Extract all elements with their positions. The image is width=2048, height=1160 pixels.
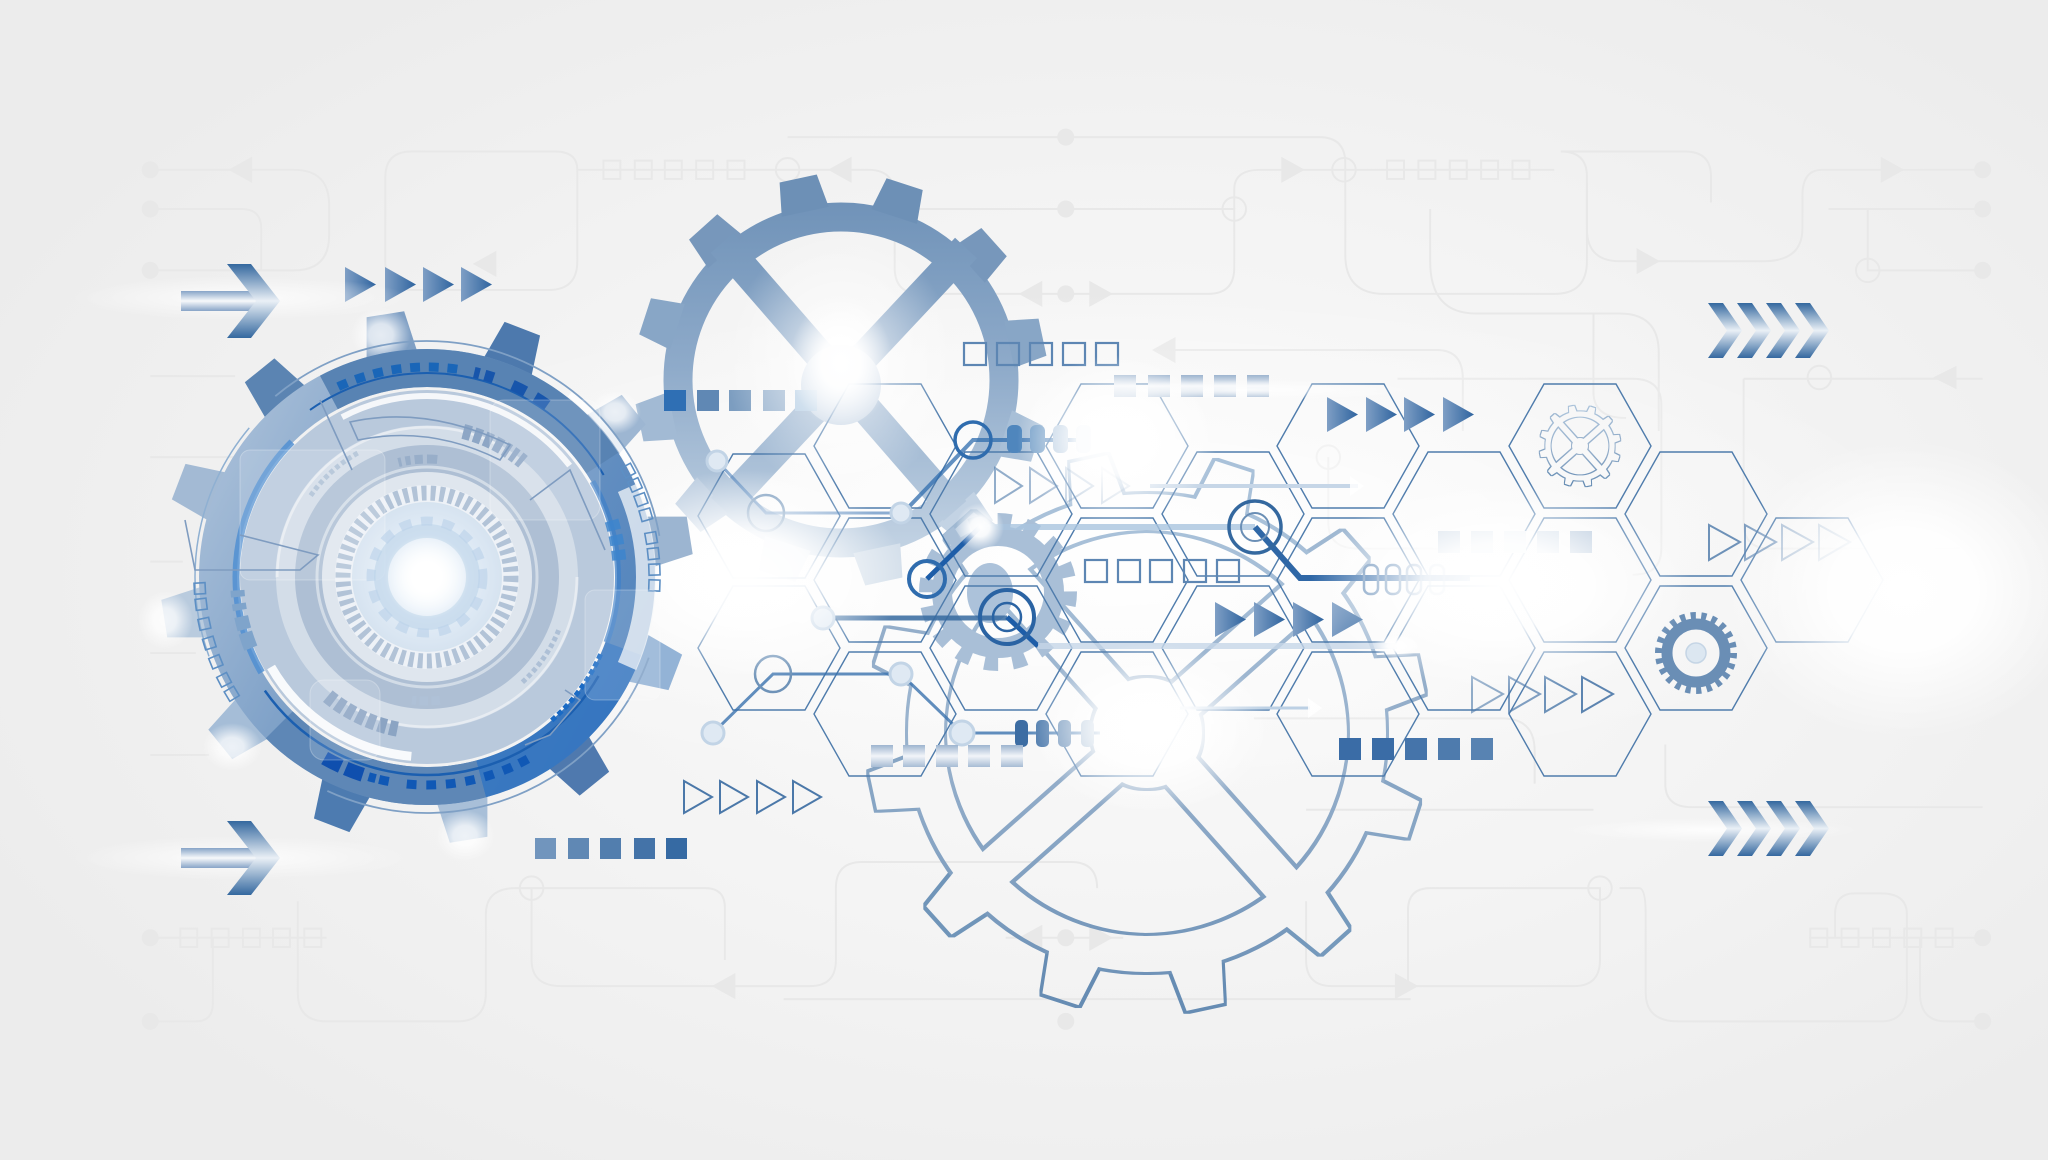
translucent overlay panels — [240, 400, 660, 760]
filled gear — [635, 174, 1047, 586]
white crescents — [182, 332, 672, 822]
icon: outlined gear in hexagon — [1540, 406, 1620, 486]
outlined square ticks on rim — [194, 463, 660, 701]
thin circuit strokes on disc — [185, 400, 605, 745]
tooth glare — [137, 307, 641, 862]
gear teeth — [160, 310, 694, 844]
arrow: bottom left — [181, 821, 280, 895]
hexagon grid — [698, 384, 1883, 776]
chevrons: bottom right — [1708, 801, 1829, 856]
icon: solid gear in hexagon — [1659, 616, 1733, 690]
main blue gear — [95, 245, 759, 909]
rim colour arcs — [95, 245, 759, 909]
circuit lines and nodes — [702, 422, 1470, 745]
soft horizontal light band — [250, 290, 1950, 790]
centre glow — [385, 535, 469, 619]
light glare spots — [70, 233, 2048, 880]
inner bar clusters — [229, 379, 625, 775]
centre pale gear — [371, 521, 483, 633]
outlined triangle rows — [684, 468, 1850, 813]
solid square rows — [535, 390, 1493, 859]
chevrons: top right — [1708, 303, 1829, 358]
large outlined gear — [868, 454, 1426, 1012]
inner concentric disc — [240, 390, 614, 764]
solid triangle rows — [345, 267, 1474, 637]
small filled gear under the hexagons — [926, 520, 1070, 664]
fading square rows — [871, 375, 1592, 767]
faint circuit board pattern — [142, 129, 1991, 1030]
arrow: top left — [181, 264, 280, 338]
streak arrows — [1308, 476, 1364, 718]
outlined square rows — [964, 343, 1239, 582]
outer rim — [218, 368, 636, 786]
rim square marks — [144, 294, 710, 860]
pill marks — [1007, 425, 1444, 747]
